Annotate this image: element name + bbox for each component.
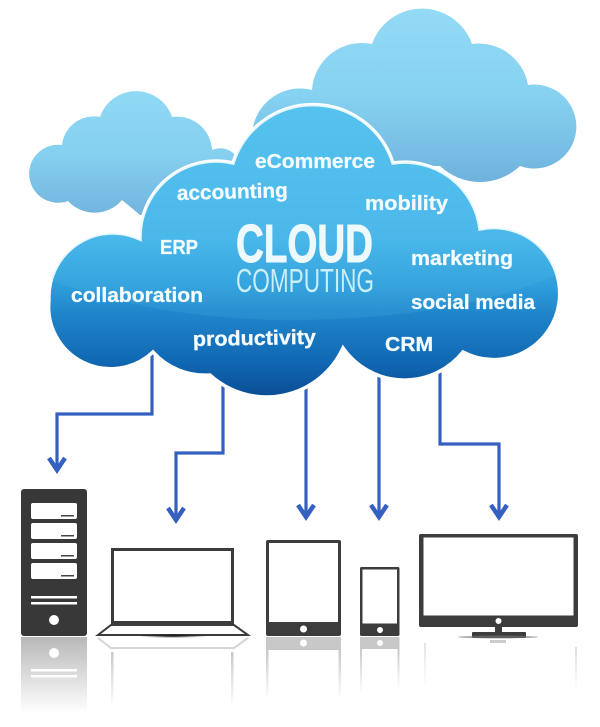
background cloud: upper right bbox=[253, 9, 576, 182]
arrow: to tablet bbox=[298, 375, 314, 517]
label: CRM: CRM bbox=[385, 333, 433, 356]
label: accounting: accounting bbox=[177, 179, 288, 205]
icon: monitor bbox=[419, 534, 578, 638]
main cloud bbox=[40, 100, 570, 397]
reflection: server bbox=[21, 637, 87, 713]
arrow: to laptop bbox=[168, 365, 223, 520]
background cloud: left bbox=[29, 91, 236, 215]
label: eCommerce: eCommerce bbox=[255, 150, 375, 173]
label: mobility: mobility bbox=[365, 192, 449, 215]
arrow: to phone bbox=[371, 365, 387, 517]
label: ERP: ERP bbox=[160, 236, 198, 259]
reflection: laptop bbox=[98, 638, 248, 707]
label: productivity: productivity bbox=[193, 326, 317, 351]
label: collaboration: collaboration bbox=[71, 284, 203, 307]
label: marketing: marketing bbox=[411, 247, 513, 270]
icon: tablet bbox=[266, 540, 341, 636]
label: social media: social media bbox=[411, 291, 536, 314]
icon: laptop bbox=[98, 550, 248, 638]
arrow: to server bbox=[49, 345, 152, 470]
reflection: tablet bbox=[266, 637, 341, 700]
icon: server bbox=[21, 489, 87, 636]
title: COMPUTING: COMPUTING bbox=[236, 262, 374, 299]
icon: phone bbox=[360, 567, 400, 636]
title: CLOUD: CLOUD bbox=[236, 214, 373, 274]
reflection: phone bbox=[360, 637, 400, 694]
reflection: monitor bbox=[424, 640, 577, 692]
arrow: to monitor bbox=[440, 360, 507, 517]
